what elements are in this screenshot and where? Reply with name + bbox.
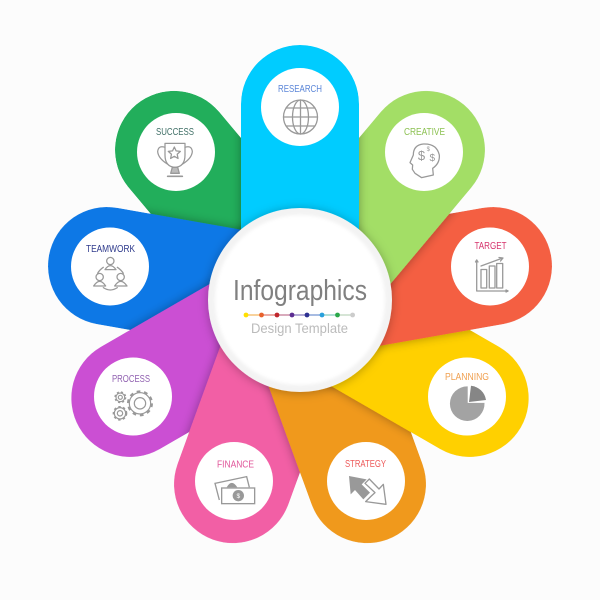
label: research: RESEARCH [278,84,322,95]
petal: teamwork [48,207,241,332]
label: finance: FINANCE [217,460,254,470]
icon: head with dollars [410,144,439,178]
label: process: PROCESS [112,374,150,385]
node: research [261,68,339,146]
node: finance [195,442,273,520]
petal: planning [325,329,529,457]
petal: creative [359,90,485,291]
icon: banknotes: $ [236,493,240,500]
petal: research [235,45,365,234]
petal: finance [174,340,302,544]
label: creative: CREATIVE [404,127,445,138]
petal: strategy [262,384,426,544]
icon: head with dollars: $ [418,148,426,163]
icon: trophy [158,143,192,176]
node: strategy [327,442,405,520]
label: target: TARGET [474,241,506,252]
title: Infographics [233,275,367,307]
node: creative [385,113,463,191]
icon: three people [94,257,127,290]
label: planning: PLANNING [445,372,489,383]
icon: opposing arrows [349,476,386,504]
icon: pie chart [450,386,486,421]
petal: target [376,207,552,352]
subtitle: Design Template [251,320,348,336]
petal ring [39,45,561,560]
petal: process [71,277,220,457]
label: teamwork: TEAMWORK [86,244,135,255]
node: planning [428,358,506,436]
node: success [137,113,215,191]
label: strategy: STRATEGY [345,459,386,470]
icon: head with dollars: $ [430,153,436,164]
icon: bar chart [476,258,508,292]
center circle [208,208,392,392]
colored dot timeline [244,313,355,317]
node: target [451,228,529,306]
node: process [94,358,172,436]
petal: success [115,90,241,230]
node: teamwork [71,228,149,306]
icon: gears [114,392,152,420]
icon: globe [284,100,318,134]
icon: head with dollars: $ [427,147,431,153]
label: success: SUCCESS [156,127,194,138]
